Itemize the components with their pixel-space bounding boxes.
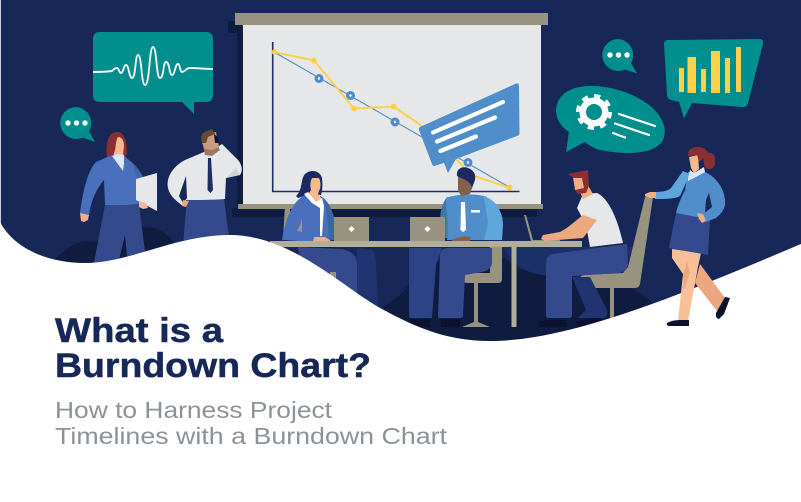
- subtitle: Timelines with a Burndown Chart: [55, 423, 448, 449]
- title: Burndown Chart?: [55, 347, 371, 385]
- ideal burndown line: [274, 52, 509, 187]
- subtitle: [55, 397, 448, 449]
- person: seated woman: [282, 171, 378, 305]
- person: man on phone: [168, 129, 242, 245]
- laptop left: [334, 217, 369, 241]
- title: What is a: [55, 312, 224, 350]
- actual burndown line: [272, 49, 512, 191]
- white wave: [0, 222, 801, 502]
- person: woman with document: [80, 132, 157, 268]
- speech bubble: gear: [556, 86, 665, 153]
- speech bubble: bar chart: [664, 39, 763, 118]
- subtitle: How to Harness Project: [55, 397, 333, 423]
- speech bubble: dots left: [60, 107, 95, 142]
- person: seated man in white shirt: [538, 170, 653, 327]
- person: standing woman: [645, 147, 730, 326]
- icon: gear: [578, 96, 610, 128]
- conference table: [270, 215, 582, 327]
- laptop right: [524, 215, 560, 241]
- chart callout bubble: [419, 83, 520, 173]
- person: seated man in blue: [409, 167, 503, 327]
- title: [55, 312, 371, 385]
- speech bubble: waveform: [93, 32, 213, 114]
- chart axes: [273, 42, 520, 192]
- laptop center: [410, 217, 445, 241]
- speech bubble: dots right: [602, 39, 637, 74]
- projector screen with burndown chart: [228, 13, 548, 217]
